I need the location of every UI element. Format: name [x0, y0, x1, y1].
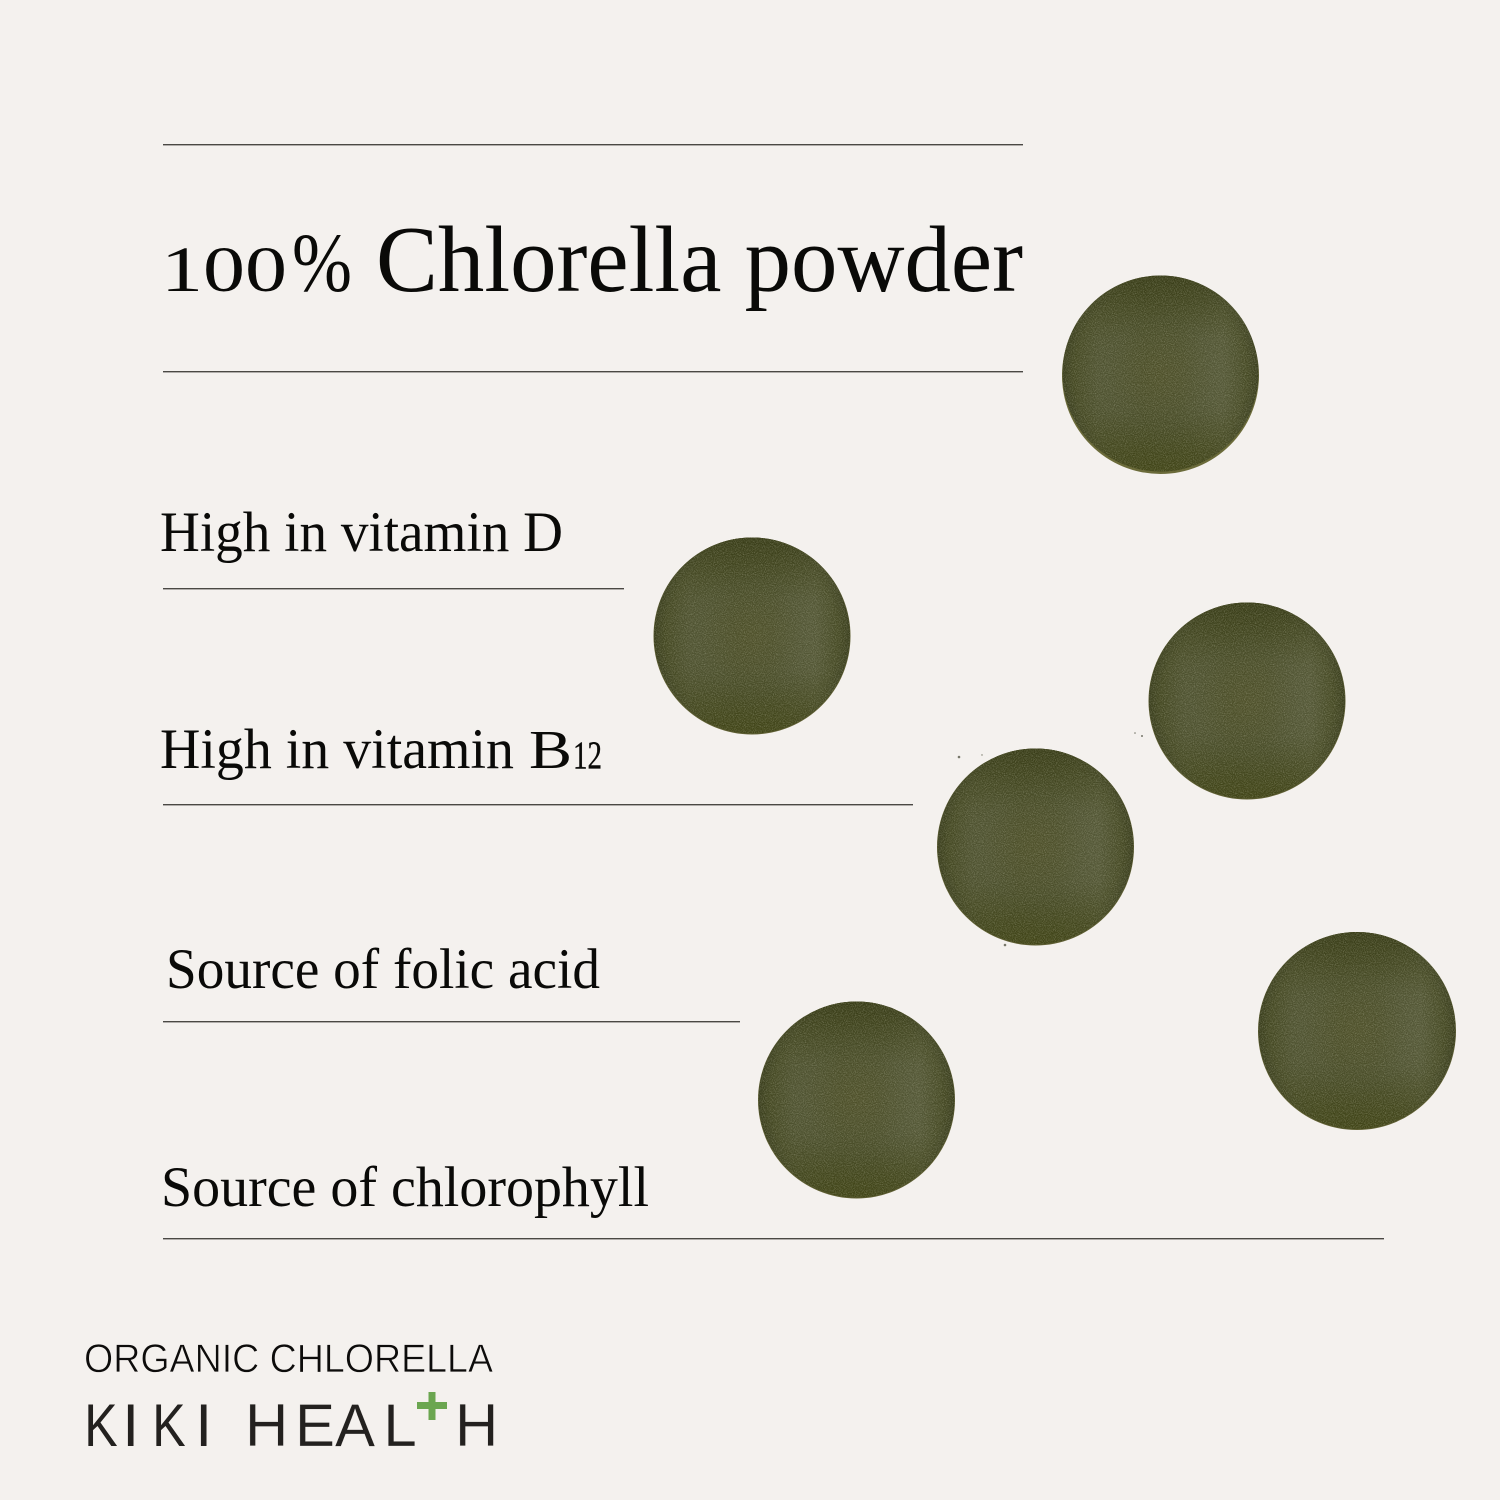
claim: vitamin B12: B: [529, 719, 572, 780]
brand logo: H: [455, 1392, 498, 1459]
claim: vitamin D: High in vitamin D: [160, 501, 563, 564]
divider: folic acid: [163, 1021, 740, 1022]
brand logo: HEAL: [245, 1392, 417, 1459]
icon: green plus: [417, 1392, 447, 1420]
brand logo: K: [84, 1392, 118, 1459]
tablet 2: [654, 538, 850, 734]
title: Chlorella powder: [376, 208, 1023, 312]
tablet 6: [758, 1002, 955, 1198]
tablet 1: [1062, 276, 1259, 474]
brand logo: K: [152, 1392, 186, 1459]
claim: vitamin B12: 12: [573, 734, 602, 777]
claim: vitamin B12: High in vitamin: [160, 718, 514, 781]
brand logo: I: [122, 1392, 139, 1459]
tablet 5: [1258, 932, 1456, 1130]
divider: title top: [163, 144, 1023, 145]
title: %: [292, 217, 352, 310]
product label: ORGANIC CHLORELLA: [84, 1337, 493, 1381]
brand logo: I: [195, 1392, 212, 1459]
divider: vitamin D: [163, 588, 624, 589]
tablet 3: [1148, 602, 1346, 800]
claim: chlorophyll: Source of chlorophyll: [161, 1156, 649, 1219]
title: 100: [161, 234, 287, 306]
divider: chlorophyll: [163, 1238, 1384, 1239]
divider: vitamin B12: [163, 804, 913, 805]
divider: title bottom: [163, 371, 1023, 372]
tablet 4: [937, 748, 1134, 946]
claim: folic acid: Source of folic acid: [166, 938, 600, 1001]
powder specks: [958, 732, 1143, 946]
brand logo: [84, 1392, 498, 1459]
